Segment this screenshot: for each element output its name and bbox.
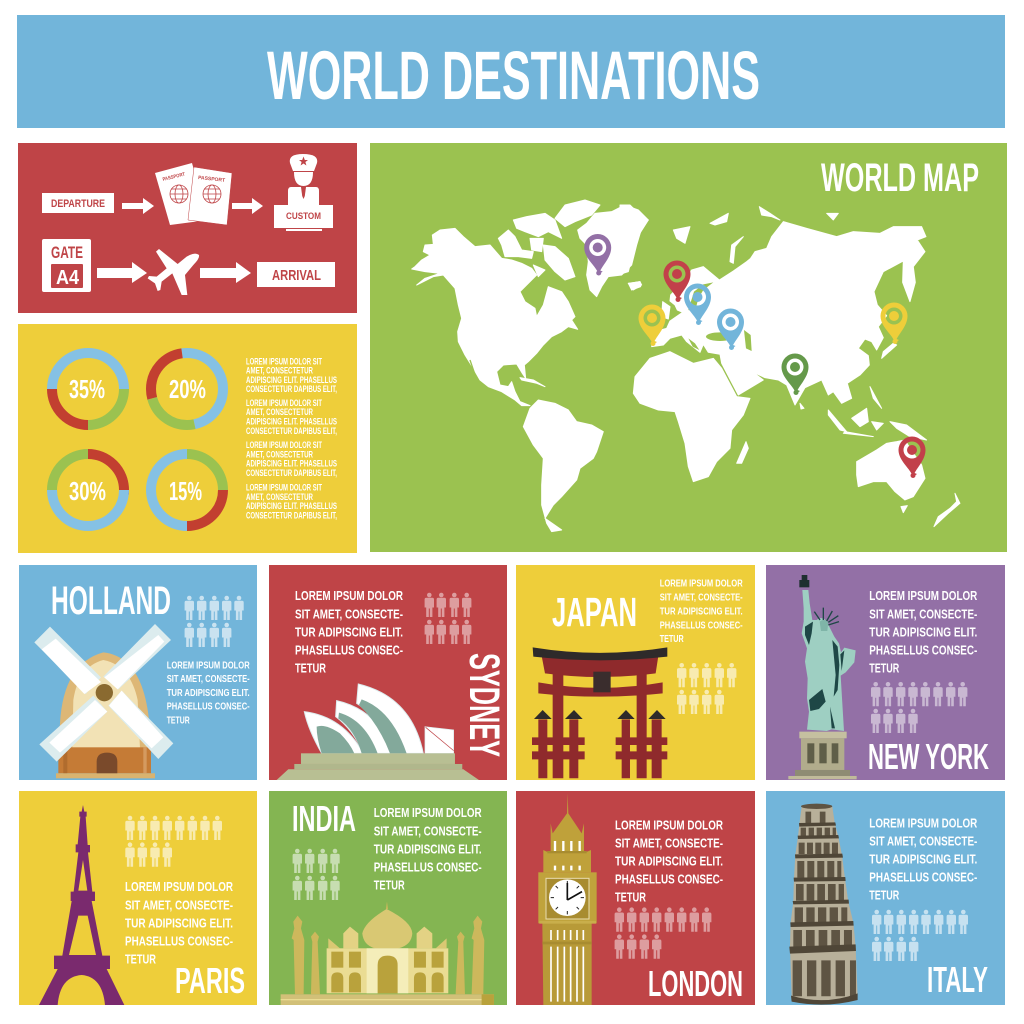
illustration: Taj Mahal xyxy=(281,902,494,1005)
icon: passports: PASSPORT xyxy=(198,175,225,184)
text block: LOREM IPSUM DOLOR xyxy=(869,589,977,603)
text block: TETUR xyxy=(295,661,326,675)
heading: PARIS xyxy=(175,960,245,1001)
panel: statistics xyxy=(18,324,357,553)
people icons xyxy=(185,596,244,647)
header banner xyxy=(17,15,1005,128)
text block xyxy=(374,806,482,892)
arrival label xyxy=(257,262,335,287)
text block: TETUR xyxy=(374,878,405,892)
donut chart 15% xyxy=(151,454,223,526)
text block: SIT AMET, CONSECTE- xyxy=(295,607,403,621)
text block: stats copy: AMET, CONSECTETUR xyxy=(246,407,313,418)
text block: stats copy: LOREM IPSUM DOLOR SIT xyxy=(246,398,322,409)
panel: India xyxy=(269,791,507,1005)
text block: PHASELLUS CONSEC- xyxy=(660,620,743,631)
pin: North Europe xyxy=(664,260,690,302)
inland seas xyxy=(688,282,752,351)
text block: stats copy: ADIPISCING ELIT. PHASELLUS xyxy=(246,375,337,386)
pin: Greenland xyxy=(584,234,611,276)
illustration: statue of liberty xyxy=(788,575,857,779)
text block xyxy=(125,880,233,966)
arrival label: ARRIVAL xyxy=(272,267,321,284)
people icons xyxy=(677,663,736,714)
text block: stats copy: LOREM IPSUM DOLOR SIT xyxy=(246,440,322,451)
illustration: leaning tower of Pisa xyxy=(789,804,858,1005)
departure label xyxy=(42,193,114,213)
text block xyxy=(660,579,743,645)
text block: stats copy: CONSECTETUR DAPIBUS ELIT, xyxy=(246,510,337,522)
text block: SIT AMET, CONSECTE- xyxy=(125,898,233,912)
pin: Turkey xyxy=(717,308,744,350)
people icons xyxy=(615,907,711,959)
text block: PHASELLUS CONSEC- xyxy=(167,702,250,713)
continents: Americas and Greenland xyxy=(412,200,648,532)
icon: airplane xyxy=(148,249,199,295)
panel: Paris xyxy=(19,791,257,1005)
text block: stats copy: ADIPISCING ELIT. PHASELLUS xyxy=(246,458,337,470)
text block: TUR ADIPISCING ELIT. xyxy=(295,625,403,639)
text block: TETUR xyxy=(167,715,190,726)
text block: TUR ADIPISCING ELIT. xyxy=(869,625,977,639)
text block: PHASELLUS CONSEC- xyxy=(125,934,233,948)
illustration: torii gate xyxy=(532,647,667,778)
text block: PHASELLUS CONSEC- xyxy=(295,643,403,657)
map pins xyxy=(584,234,926,478)
panel: Japan xyxy=(516,565,755,780)
text block: PHASELLUS CONSEC- xyxy=(615,873,723,887)
text block xyxy=(295,589,403,675)
illustration: Big Ben xyxy=(538,793,597,1005)
panel: airport process xyxy=(18,143,357,313)
text block: stats copy: CONSECTETUR DAPIBUS ELIT, xyxy=(246,468,337,479)
people icons xyxy=(125,816,222,867)
text block: stats copy: CONSECTETUR DAPIBUS ELIT, xyxy=(246,426,337,437)
text block: TUR ADIPISCING ELIT. xyxy=(167,688,250,699)
people icons xyxy=(425,593,471,644)
text block: stats copy: AMET, CONSECTETUR xyxy=(246,366,313,376)
text block: SIT AMET, CONSECTE- xyxy=(167,674,250,685)
people icons xyxy=(872,910,968,961)
text block: stats copy: ADIPISCING ELIT. PHASELLUS xyxy=(246,416,337,428)
illustration: windmill xyxy=(34,624,173,778)
panel: world map xyxy=(370,143,1007,552)
text block: LOREM IPSUM DOLOR xyxy=(295,589,403,603)
donut chart 20%: 20% xyxy=(169,374,206,404)
text block: PHASELLUS CONSEC- xyxy=(869,871,977,885)
heading: SYDNEY xyxy=(460,653,508,757)
continents: Europe, Africa, Asia, Oceania xyxy=(620,205,960,527)
pin: Central Europe xyxy=(684,284,711,325)
text block: TUR ADIPISCING ELIT. xyxy=(869,853,977,867)
text block: stats copy xyxy=(246,356,337,522)
heading: INDIA xyxy=(292,798,356,839)
text block xyxy=(869,816,977,903)
people icons xyxy=(293,849,340,900)
pin: Australia xyxy=(898,436,926,478)
heading: JAPAN xyxy=(552,589,637,635)
pin: Spain xyxy=(638,304,666,346)
text block: TUR ADIPISCING ELIT. xyxy=(125,916,233,930)
text block: TETUR xyxy=(660,634,684,645)
panel: Sydney xyxy=(269,565,508,780)
text block: PHASELLUS CONSEC- xyxy=(869,643,977,657)
donut chart 35% xyxy=(52,353,124,425)
icon: customs officer xyxy=(274,154,333,231)
icon: passports xyxy=(155,163,232,225)
text block: stats copy: ADIPISCING ELIT. PHASELLUS xyxy=(246,501,337,512)
text block: TETUR xyxy=(125,952,156,966)
panel: Italy xyxy=(766,791,1005,1005)
text block: SIT AMET, CONSECTE- xyxy=(869,835,977,849)
heading: HOLLAND xyxy=(51,579,171,623)
text block: LOREM IPSUM DOLOR xyxy=(869,816,977,830)
text block: TUR ADIPISCING ELIT. xyxy=(374,842,482,856)
icon: customs officer: CUSTOM xyxy=(286,211,321,221)
text block xyxy=(869,589,977,675)
text block: TUR ADIPISCING ELIT. xyxy=(615,855,723,869)
text block: LOREM IPSUM DOLOR xyxy=(125,880,233,894)
text block xyxy=(615,818,723,905)
arrow to arrival xyxy=(200,262,251,283)
text block: SIT AMET, CONSECTE- xyxy=(660,592,743,603)
panel: London xyxy=(516,791,755,1005)
text block: stats copy: CONSECTETUR DAPIBUS ELIT, xyxy=(246,384,337,395)
illustration: Eiffel tower xyxy=(39,805,124,1005)
text block: TETUR xyxy=(615,891,646,905)
donut chart 30%: 30% xyxy=(69,476,106,506)
text block xyxy=(167,660,250,726)
gate sign xyxy=(42,239,91,292)
heading: ITALY xyxy=(927,959,988,1000)
text block: SIT AMET, CONSECTE- xyxy=(615,837,723,851)
text block: stats copy: LOREM IPSUM DOLOR SIT xyxy=(246,482,322,494)
text block: SIT AMET, CONSECTE- xyxy=(374,824,482,838)
donut chart 35%: 35% xyxy=(69,374,105,404)
donut chart 20% xyxy=(151,353,223,425)
text block: LOREM IPSUM DOLOR xyxy=(615,818,723,832)
pin: Japan xyxy=(880,302,908,344)
icon: passports: PASSPORT xyxy=(162,172,186,183)
text block: TETUR xyxy=(869,889,899,903)
people icons xyxy=(871,682,967,733)
text block: stats copy: AMET, CONSECTETUR xyxy=(246,450,313,460)
arrow to passports xyxy=(122,198,154,214)
text block: SIT AMET, CONSECTE- xyxy=(869,607,977,621)
donut chart 30% xyxy=(52,454,124,526)
text block: stats copy: LOREM IPSUM DOLOR SIT xyxy=(246,356,322,368)
text block: stats copy: AMET, CONSECTETUR xyxy=(246,492,313,503)
arrow to custom xyxy=(232,198,263,214)
text block: TUR ADIPISCING ELIT. xyxy=(660,606,743,617)
text block: LOREM IPSUM DOLOR xyxy=(374,806,482,820)
illustration: Sydney opera house xyxy=(277,684,479,780)
panel: Holland xyxy=(19,565,257,780)
panel: New York xyxy=(766,565,1005,780)
gate sign: A4 xyxy=(56,267,80,289)
text block: TETUR xyxy=(869,661,899,675)
heading: LONDON xyxy=(648,963,743,1004)
departure label: DEPARTURE xyxy=(51,198,105,210)
text block: LOREM IPSUM DOLOR xyxy=(660,579,743,590)
donut chart 15%: 15% xyxy=(169,476,202,506)
arrow to plane xyxy=(97,262,147,283)
text block: PHASELLUS CONSEC- xyxy=(374,860,482,874)
pin: India xyxy=(782,354,808,395)
gate sign: GATE xyxy=(51,243,83,262)
text block: LOREM IPSUM DOLOR xyxy=(167,660,250,671)
